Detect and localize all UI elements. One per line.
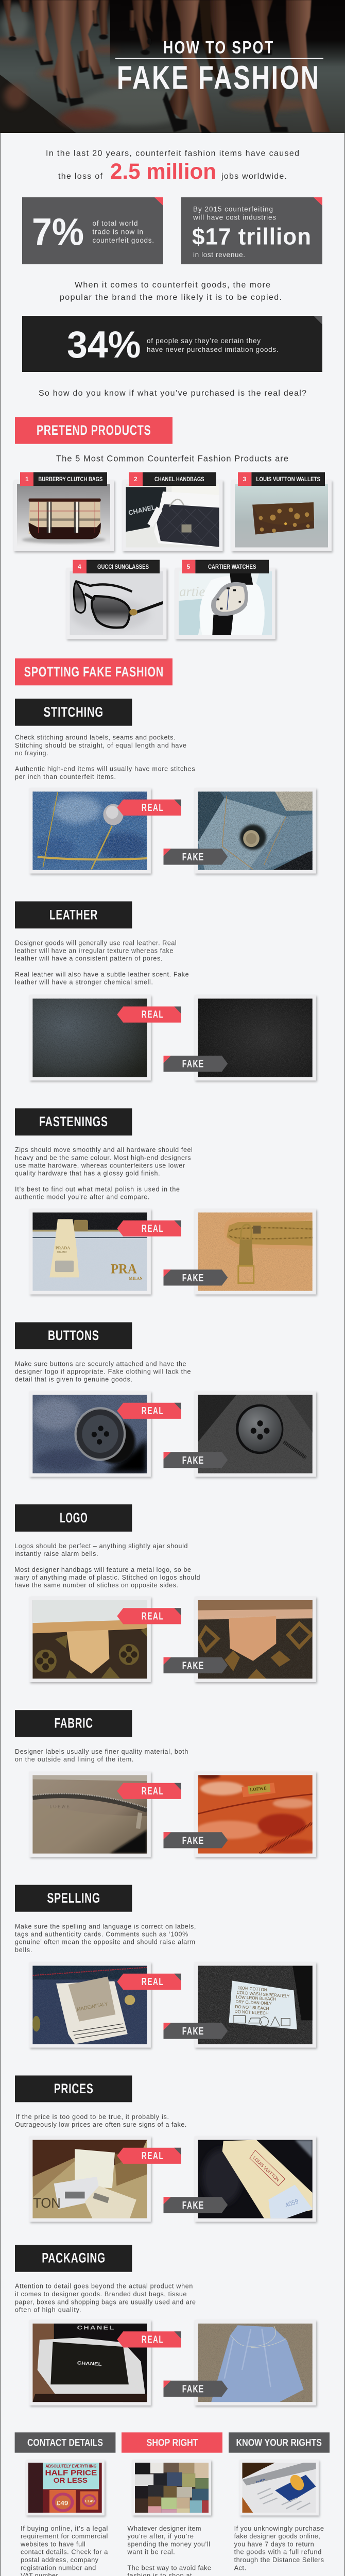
hero banner <box>0 0 345 133</box>
text: leather advice: leather will have an irregular texture whereas fake <box>15 947 173 954</box>
real photo: taupe lining: LOEWE <box>49 1804 71 1809</box>
heading: fabric: FABRIC <box>55 1716 93 1731</box>
product label 5: 5 <box>186 563 191 570</box>
photo: paypal on laptop <box>239 2460 319 2515</box>
heading: stitching: STITCHING <box>44 704 104 720</box>
text: contact details advice: requirement for commercial <box>21 2532 108 2540</box>
photo: half price sign: £149 <box>85 2499 95 2503</box>
stat box: 7% <box>22 197 163 264</box>
product label 4: 4 <box>78 563 81 570</box>
fake photo: cream price tag: LOUIS VUITTON <box>252 2155 280 2182</box>
heading: buttons <box>15 1322 132 1349</box>
photo: market stall of bags <box>132 2460 211 2515</box>
real photo: prada zip: PRADA <box>56 1246 70 1250</box>
tag: real: REAL <box>142 802 164 814</box>
title rule <box>115 58 323 59</box>
text: spelling advice: Make sure the spelling and language is correct on labels, <box>15 1923 196 1930</box>
text: prices advice <box>15 2113 186 2128</box>
section: fastenings <box>15 1108 316 1294</box>
heading: spotting fake fashion <box>15 658 173 685</box>
heading: leather <box>15 902 132 928</box>
subheading: five products: The 5 Most Common Counterfeit Fashion Products are <box>56 454 288 464</box>
fake photo: blue dust bag <box>195 2320 316 2405</box>
heading: shop right: SHOP RIGHT <box>147 2437 198 2448</box>
section: packaging <box>15 2245 316 2405</box>
section: stitching <box>15 699 316 874</box>
tag: fake: FAKE <box>182 1660 204 1671</box>
text: fastenings advice: quality hardware that has a glossy gold finish. <box>15 1170 160 1177</box>
highlight figure: 2.5 million: 2.5 million <box>110 159 216 184</box>
intro statement: jobs worldwide. <box>221 172 287 181</box>
column: know your rights <box>229 2432 330 2576</box>
real photo: chanel box: CHANEL <box>77 2361 102 2367</box>
heading: buttons: BUTTONS <box>48 1328 99 1343</box>
text: logo advice <box>14 1543 200 1589</box>
tag: fake: FAKE <box>182 2026 204 2037</box>
tag: real <box>117 1608 181 1624</box>
photo: cartier watch <box>179 571 272 635</box>
product label 4 <box>73 560 160 573</box>
text: buttons advice: Make sure buttons are securely attached and have the <box>15 1360 186 1367</box>
intro statement <box>46 149 299 184</box>
fake photo: leather zip <box>195 1209 316 1294</box>
stat box: 7%: of total world <box>93 219 138 227</box>
photo: half price sign: OR LESS <box>54 2477 88 2485</box>
real photo: chanel box <box>29 2320 151 2405</box>
text: contact details advice: contact details. Check for a <box>21 2548 108 2555</box>
text: know your rights advice: you have 7 days to return <box>234 2540 314 2548</box>
product label 1 <box>20 472 107 486</box>
text: spelling advice: tags and authenticity cards. Comments such as ‘100% <box>15 1931 188 1938</box>
comparison: fabric <box>29 1771 319 1857</box>
comparison: packaging <box>29 2320 316 2405</box>
text: fastenings advice: Zips should move smoothly and all hardware should feel <box>15 1146 193 1154</box>
text: shop right advice: want it be real. <box>127 2548 175 2555</box>
tag: real: REAL <box>142 1009 164 1021</box>
stat box: 34%: 34% <box>67 324 141 366</box>
photo: gucci sunglasses <box>70 571 163 635</box>
text: logo advice: Most designer handbags will feature a metal logo, so be <box>14 1566 191 1573</box>
tag: fake: FAKE <box>182 2200 204 2211</box>
product label 5: CARTIER WATCHES <box>208 563 256 570</box>
section: buttons <box>15 1322 316 1477</box>
heading: leather: LEATHER <box>49 907 98 922</box>
text: packaging advice: paper, boxes and shopping bags are usually used and are <box>15 2298 196 2306</box>
text: shop right advice: The best way to avoid fake <box>127 2564 211 2571</box>
heading: spotting fake fashion: SPOTTING FAKE FASHION <box>24 664 164 680</box>
statement: popular brands: When it comes to counterfeit goods, the more <box>75 281 270 290</box>
tag: real <box>117 800 181 816</box>
tag: fake <box>164 2381 228 2397</box>
text: know your rights advice: If you unknowingly purchase <box>234 2524 324 2532</box>
real photo: denim care label <box>29 1962 151 2047</box>
fake photo: misspelt care label: COLD WASH SEPERATELY <box>236 1990 290 1999</box>
real photo: authentic tags <box>29 2136 151 2222</box>
text: leather advice: leather will have a stronger chemical smell. <box>15 979 153 986</box>
text: packaging advice: it comes to designer goods. Branded dust bags, tissue <box>15 2291 186 2298</box>
heading: stitching <box>15 699 132 726</box>
fake photo: misspelt care label <box>195 1962 316 2047</box>
stat box: $17 trillion <box>181 197 322 264</box>
photo: half price sign: HALF PRICE <box>45 2468 97 2477</box>
product label 2: 2 <box>134 476 137 483</box>
product label 3: 3 <box>243 476 246 483</box>
real photo: chanel box: CHANEL <box>77 2324 114 2331</box>
product 3: louis vuitton wallets <box>231 472 332 551</box>
fake photo: monogram patch <box>195 1597 316 1682</box>
product 2: chanel handbags <box>123 472 222 551</box>
text: logo advice: Logos should be perfect – anything slightly ajar should <box>14 1543 188 1550</box>
heading: spelling: SPELLING <box>47 1890 100 1906</box>
fake photo: plain button <box>195 1391 316 1477</box>
text: buttons advice <box>15 1360 191 1383</box>
text: contact details advice <box>20 2524 108 2576</box>
real photo: monogram patch <box>29 1597 151 1682</box>
stat box: $17 trillion: in lost revenue. <box>193 251 245 259</box>
real photo: prada zip: PRA <box>111 1262 137 1277</box>
tag: fake: FAKE <box>182 1835 204 1846</box>
tag: real: REAL <box>142 2150 164 2162</box>
heading: fastenings: FASTENINGS <box>39 1114 108 1129</box>
product label 4: GUCCI SUNGLASSES <box>97 563 149 570</box>
real photo: leather texture <box>29 995 151 1080</box>
heading: fabric <box>15 1710 132 1737</box>
tag: fake <box>164 1056 228 1072</box>
tag: real <box>117 1007 181 1023</box>
text: know your rights advice: the goods with a full refund <box>234 2548 321 2555</box>
tag: real: REAL <box>142 1405 164 1417</box>
photo: burberry bag <box>17 484 110 545</box>
comparison: logo <box>29 1597 316 1682</box>
text: prices advice: If the price is too good to be true, it probably is. <box>15 2113 169 2121</box>
stat box: 7%: counterfeit goods. <box>93 236 154 244</box>
fake photo: orange lining <box>195 1771 319 1857</box>
fake photo: misspelt care label: LOW LRON BLEACH <box>236 1994 276 2002</box>
tag: fake <box>164 1452 228 1468</box>
fake photo: misspelt care label: 100% COTTON <box>237 1985 267 1992</box>
tag: fake <box>164 849 228 865</box>
text: know your rights advice: Act. <box>234 2564 246 2571</box>
tag: fake <box>164 1269 228 1285</box>
tag: fake <box>164 1657 228 1673</box>
heading: pretend products: PRETEND PRODUCTS <box>37 422 151 438</box>
photo: half price sign: £49 <box>57 2499 68 2506</box>
text: spelling advice <box>15 1923 196 1954</box>
tag: fake <box>164 2023 228 2039</box>
tag: fake: FAKE <box>182 1455 204 1466</box>
stat box: $17 trillion: will have cost industries <box>193 213 276 222</box>
fake photo: cream price tag <box>195 2136 316 2222</box>
tag: real <box>117 1783 181 1799</box>
product label 1: BURBERRY CLUTCH BAGS <box>38 476 102 483</box>
photo: louis vuitton wallet <box>235 484 328 547</box>
section: spelling <box>15 1885 316 2047</box>
stat box: 34%: of people say they’re certain they <box>147 337 261 345</box>
intro statement: the loss of <box>58 172 103 181</box>
real photo: authentic tags: TON <box>33 2195 61 2211</box>
text: stitching advice: per inch than counterfeit items. <box>15 773 116 781</box>
text: shop right advice: you’re after, if you’re <box>127 2532 194 2540</box>
text: packaging advice: Attention to detail goes beyond the actual product when <box>15 2283 193 2290</box>
tag: fake: FAKE <box>182 1273 204 1284</box>
real photo: prada zip: MILAN <box>129 1276 143 1281</box>
text: leather advice <box>15 939 189 986</box>
text: logo advice: have the same number of stiches on opposite sides. <box>14 1582 178 1589</box>
product 5: cartier watches <box>175 560 275 639</box>
product 4: gucci sunglasses <box>66 560 167 639</box>
text: fastenings advice: It’s best to find out what metal polish is used in the <box>15 1186 180 1193</box>
stat box: 7%: 7% <box>32 210 84 253</box>
text: contact details advice: postal address, company <box>21 2556 99 2564</box>
tag: fake: FAKE <box>182 2383 204 2395</box>
comparison: fastenings <box>29 1209 316 1294</box>
product label 2: CHANEL HANDBAGS <box>154 476 204 483</box>
comparison: spelling <box>29 1962 316 2047</box>
text: contact details advice: registration number and <box>21 2564 96 2571</box>
tag: fake: FAKE <box>182 852 204 863</box>
tag: fake: FAKE <box>182 1059 204 1070</box>
heading: fastenings <box>15 1108 132 1136</box>
product label 1: 1 <box>25 476 29 483</box>
intro statement: In the last 20 years, counterfeit fashion items have caused <box>46 149 299 158</box>
text: stitching advice: Authentic high-end items will usually have more stitches <box>15 765 195 772</box>
text: shop right advice <box>127 2524 216 2576</box>
text: leather advice: Real leather will also have a subtle leather scent. Fake <box>15 971 189 978</box>
real photo: prada zip: MILANO <box>57 1250 67 1254</box>
stat box: 34%: have never purchased imitation goods. <box>147 346 278 353</box>
text: know your rights advice: through the Distance Sellers <box>234 2556 324 2564</box>
tag: real <box>117 2148 181 2164</box>
text: packaging advice <box>15 2283 196 2314</box>
product label 5 <box>182 560 269 573</box>
stat box: 7%: trade is now in <box>93 228 143 236</box>
text: stitching advice: Check stitching around labels, seams and pockets. <box>15 734 176 741</box>
product label 3: LOUIS VUITTON WALLETS <box>256 476 320 483</box>
statement: popular brands <box>60 281 282 302</box>
text: know your rights advice <box>234 2524 324 2576</box>
tag: real: REAL <box>142 1611 164 1622</box>
heading: packaging: PACKAGING <box>42 2250 106 2266</box>
text: logo advice: wary of anything made of plastic. Stitched on logos should <box>14 1574 200 1581</box>
stat box: 34% <box>22 316 322 372</box>
heading: contact details <box>15 2432 115 2453</box>
statement: popular brands: popular the brand the more likely it is to be copied. <box>60 293 282 302</box>
tag: real: REAL <box>142 1786 164 1797</box>
text: contact details advice: If buying online, it’s a legal <box>21 2524 108 2532</box>
section: fabric <box>15 1710 319 1857</box>
section: leather <box>15 902 316 1080</box>
column: contact details <box>15 2432 115 2576</box>
tag: real <box>117 1221 181 1236</box>
heading: packaging <box>15 2245 132 2272</box>
real photo: denim rivet <box>29 788 152 874</box>
heading: contact details: CONTACT DETAILS <box>27 2437 103 2448</box>
column: shop right <box>122 2432 222 2576</box>
text: spelling advice: bells. <box>15 1946 32 1954</box>
section: logo <box>14 1504 316 1682</box>
heading: know your rights <box>229 2432 330 2453</box>
text: know your rights advice: fake designer goods online, <box>234 2532 320 2540</box>
stat box: $17 trillion: $17 trillion <box>192 224 312 249</box>
photo: cartier watch: artie <box>179 584 205 599</box>
text: buttons advice: designer logo if appropriate. Fake clothing will lack the <box>15 1368 191 1376</box>
text: fabric advice: on the outside and lining of the item. <box>15 1756 133 1763</box>
text: leather advice: leather will have a consistent pattern of pores. <box>15 955 162 962</box>
text: fastenings advice: use matte hardware, whereas counterfeiters use lower <box>15 1162 185 1170</box>
text: stitching advice: no fraying. <box>15 750 48 757</box>
fake photo: orange lining: LOEWE <box>250 1785 267 1792</box>
section: prices <box>15 2075 316 2222</box>
text: leather advice: Designer goods will generally use real leather. Real <box>15 939 177 946</box>
fake photo: misspelt care label: DRY CLDAN ONLY <box>235 1999 272 2006</box>
title: how to spot: HOW TO SPOT <box>163 38 274 58</box>
heading: shop right <box>122 2432 222 2453</box>
photo: chanel handbag <box>126 484 219 547</box>
text: fastenings advice: authentic model you’re after and compare. <box>15 1194 149 1201</box>
question line: So how do you know if what you’ve purchased is the real deal? <box>39 389 306 398</box>
heading: pretend products <box>15 417 173 444</box>
heading: spelling <box>15 1885 132 1912</box>
text: packaging advice: often of high quality. <box>15 2307 81 2314</box>
photo: half price sign <box>26 2460 105 2515</box>
tag: real <box>117 1974 181 1990</box>
text: buttons advice: detail that is given to genuine goods. <box>15 1376 132 1383</box>
text: shop right advice: Whatever designer item <box>127 2524 201 2532</box>
text: prices advice: Outrageously low prices are often sure signs of a fake. <box>15 2121 186 2128</box>
real photo: denim care label: MADEINITALY <box>76 2001 109 2013</box>
tag: real: REAL <box>142 2334 164 2345</box>
heading: logo: LOGO <box>60 1510 88 1526</box>
heading: prices: PRICES <box>54 2081 94 2096</box>
photo: chanel handbag: CHANEL <box>128 503 156 517</box>
text: fabric advice: Designer labels usually use finer quality material, both <box>15 1748 188 1755</box>
fake photo: cream price tag: 4059 <box>284 2197 300 2209</box>
fake photo: denim rivet <box>195 788 316 874</box>
text: fastenings advice: heavy and be the same colour. Most high-end designers <box>15 1154 191 1161</box>
fake photo: leather texture <box>195 995 316 1080</box>
real photo: burberry button <box>29 1391 151 1477</box>
heading: know your rights: KNOW YOUR RIGHTS <box>236 2437 322 2448</box>
fake photo: misspelt care label: DO NOT BLEACH <box>235 2004 269 2011</box>
fake photo: misspelt care label: DO NOT BLEECH <box>234 2009 269 2016</box>
product label 2 <box>129 472 216 486</box>
comparison: leather <box>29 995 316 1080</box>
text: contact details advice: websites to have full <box>20 2540 85 2548</box>
heading: logo <box>15 1504 132 1532</box>
tag: real: REAL <box>142 1223 164 1234</box>
tag: real <box>117 2331 181 2347</box>
comparison: stitching <box>29 788 316 874</box>
real photo: taupe lining <box>29 1771 151 1857</box>
tag: real: REAL <box>142 1976 164 1988</box>
comparison: prices <box>29 2136 316 2222</box>
photo: paypal on laptop: PayPal <box>255 2478 266 2484</box>
heading: prices <box>15 2075 132 2102</box>
text: shop right advice: spending the money you’ll <box>127 2540 210 2548</box>
tag: fake <box>164 1832 228 1848</box>
comparison: buttons <box>29 1391 316 1477</box>
text: stitching advice <box>15 734 195 781</box>
text: logo advice: instantly raise alarm bells. <box>14 1550 98 1557</box>
real photo: prada zip <box>29 1209 151 1294</box>
text: spelling advice: genuine’ often mean the opposite and should raise alarm <box>15 1939 195 1946</box>
product 1: burberry clutch bags <box>13 472 114 551</box>
product label 3 <box>238 472 325 486</box>
text: stitching advice: Stitching should be straight, of equal length and have <box>15 742 186 749</box>
tag: fake <box>164 2197 228 2213</box>
text: fastenings advice <box>15 1146 193 1201</box>
tag: real <box>117 1403 181 1419</box>
text: fabric advice <box>15 1748 188 1763</box>
stat box: $17 trillion: By 2015 counterfeiting <box>193 206 273 213</box>
